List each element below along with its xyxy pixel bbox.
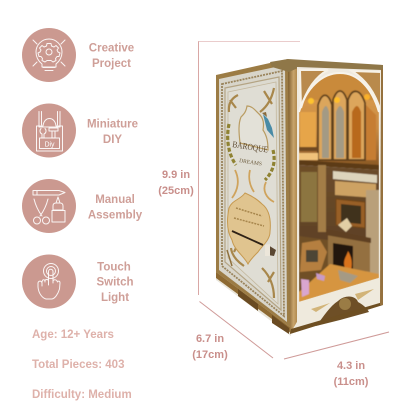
page edge under cover: [216, 270, 291, 336]
label: Creative Project: Project: [92, 58, 131, 70]
label: Creative Project: Creative: [89, 42, 134, 54]
cover plaque with slot: [227, 193, 270, 264]
spec list: [32, 329, 132, 401]
icon: finger touching switch: [22, 254, 76, 308]
base ornament: [290, 278, 383, 334]
dimension: width: (11cm): [334, 376, 369, 388]
upper gothic wall: [299, 73, 379, 165]
dimension: height: 9.9 in: [162, 169, 190, 181]
right frame edge: [380, 69, 383, 305]
spec: age: Age: 12+ Years: [32, 329, 114, 341]
feature: miniature DIY: [22, 104, 138, 158]
arch corner fretwork: [300, 70, 381, 112]
dimension: depth: 6.7 in: [196, 333, 224, 345]
book spine edge: [288, 62, 299, 334]
icon: pencil, scissors, glue and paper: [22, 179, 76, 233]
label: Touch Switch Light: Switch: [96, 276, 134, 288]
side frame: [290, 67, 383, 334]
spec: total pieces: Total Pieces: 403: [32, 359, 124, 371]
spec: difficulty: Difficulty: Medium: [32, 389, 132, 401]
bird: [263, 114, 274, 138]
ribbons: [232, 170, 274, 202]
arch interior scene: [299, 73, 379, 302]
label: Miniature DIY: DIY: [103, 134, 122, 146]
product: book nook: [216, 59, 383, 336]
book top edge: [270, 59, 383, 72]
book cover: DREAMS: [239, 158, 262, 168]
dimension: width: 4.3 in: [337, 360, 365, 372]
label: Manual Assembly: Assembly: [88, 210, 143, 222]
lower corner flourishes: [227, 250, 232, 266]
shelf divider: [299, 160, 379, 170]
lower room: [299, 165, 379, 302]
dimension: height: (25cm): [158, 185, 194, 197]
feature: touch switch light: [22, 254, 134, 308]
label: Manual Assembly: Manual: [95, 194, 135, 206]
feature: creative project: [22, 28, 134, 82]
scroll frame: [239, 106, 268, 150]
label: Touch Switch Light: Touch: [97, 262, 131, 274]
desk and floor: [299, 236, 328, 292]
label: Touch Switch Light: Light: [101, 292, 129, 304]
gold bottom edge and feet: [216, 272, 291, 333]
dimension: depth: (17cm): [192, 349, 228, 361]
dimension: height: [158, 42, 300, 295]
icon: light bulb with gear: [22, 28, 76, 82]
fireplace: [328, 231, 370, 272]
label: Miniature DIY: Miniature: [87, 118, 138, 130]
laurels: [228, 124, 236, 165]
icon: apron with tools: Diy: [44, 142, 55, 148]
feature: manual assembly: [22, 179, 143, 233]
corner ornaments: [229, 88, 274, 298]
dimension: width: [284, 332, 389, 388]
arch rim: [299, 73, 379, 112]
dimension: depth: [192, 302, 273, 361]
cover title: BAROQUE: [232, 139, 269, 155]
infographic canvas: [22, 28, 390, 400]
book cover: [216, 59, 292, 336]
